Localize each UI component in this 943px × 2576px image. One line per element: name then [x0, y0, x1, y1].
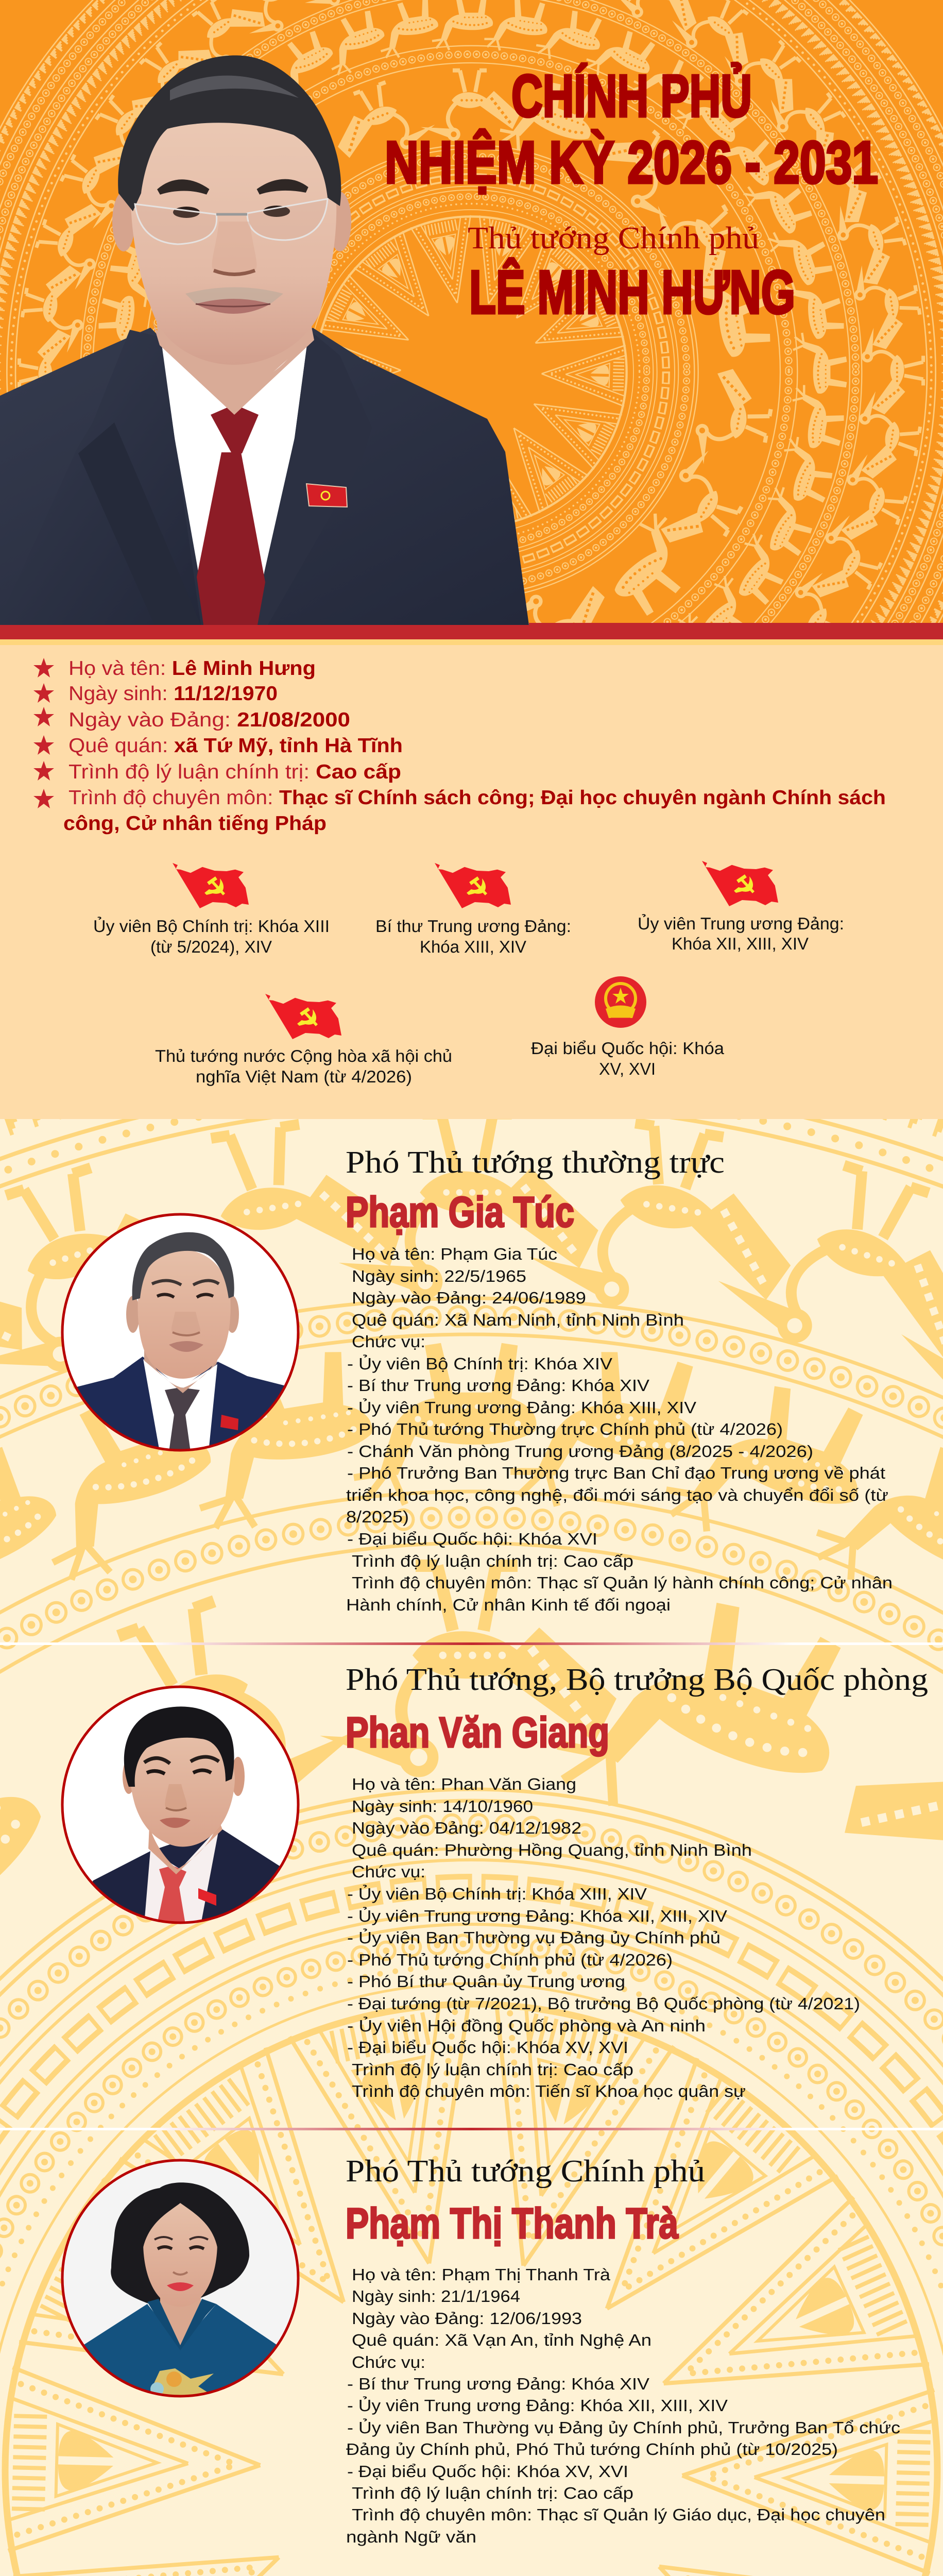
biography text: Ngày vào Đảng: 04/12/1982 — [352, 1819, 581, 1837]
caption: Central Committee — [638, 914, 844, 953]
caption: Politburo: (từ 5/2024), XIV — [150, 937, 272, 956]
biography text: Chức vụ: — [352, 1332, 425, 1351]
biography text: Trình độ lý luận chính trị: Cao cấp — [352, 2484, 633, 2502]
portrait: Phan Văn Giang — [61, 1686, 304, 1928]
hero name: LÊ MINH HƯNG — [469, 258, 795, 327]
icon: national emblem — [595, 976, 646, 1028]
biography text: - Phó Trưởng Ban Thường trực Ban Chỉ đạo Trung ương về phát — [347, 1464, 885, 1482]
portrait: Phạm Thị Thanh Trà — [57, 2159, 304, 2402]
name: Phạm Thị Thanh Trà — [346, 2199, 679, 2247]
biography text: Quê quán: Phường Hồng Quang, tỉnh Ninh Bình — [352, 1841, 752, 1859]
panel: Phan Văn Giang — [61, 1663, 928, 2100]
biography text: Trình độ chuyên môn: Thạc sĩ Quản lý hành chính công; Cử nhân — [352, 1573, 893, 1592]
heading: Phó Thủ tướng Chính phủ — [346, 2154, 705, 2189]
biography text: 8/2025) — [346, 1507, 409, 1526]
biography text: - Ủy viên Bộ Chính trị: Khóa XIII, XIV — [347, 1885, 647, 1903]
personal details list: Họ và tên: Lê Minh Hưng — [68, 657, 316, 680]
hero background: bronze drum — [0, 0, 943, 623]
red band — [0, 623, 943, 639]
hero portrait: Lê Minh Hưng — [0, 56, 529, 625]
biography text: - Bí thư Trung ương Đảng: Khóa XIV — [347, 1376, 650, 1395]
caption: Secretariat: Bí thư Trung ương Đảng: — [375, 917, 571, 936]
biography text: Trình độ lý luận chính trị: Cao cấp — [352, 1552, 633, 1570]
biography text: Ngày vào Đảng: 12/06/1993 — [352, 2309, 582, 2328]
biography text: Họ và tên: Phạm Gia Túc — [352, 1245, 557, 1263]
biography text: - Đại tướng (từ 7/2021), Bộ trưởng Bộ Quốc phòng (từ 4/2021) — [347, 1994, 860, 2013]
biography text: - Ủy viên Ban Thường vụ Đảng ủy Chính phủ — [347, 1928, 721, 1947]
hero subtitle: Thủ tướng Chính phủ — [468, 221, 759, 256]
dress ornament — [150, 2368, 214, 2395]
bullet stars — [33, 658, 54, 808]
personal details list: công, Cử nhân tiếng Pháp — [63, 812, 327, 835]
caption: Politburo: Ủy viên Bộ Chính trị: Khóa XIII — [93, 917, 330, 936]
biography text: - Bí thư Trung ương Đảng: Khóa XIV — [347, 2375, 650, 2393]
biography text: - Phó Thủ tướng Chính phủ (từ 4/2026) — [347, 1951, 673, 1969]
biography text: Đảng ủy Chính phủ, Phó Thủ tướng Chính phủ (từ 10/2025) — [346, 2440, 838, 2459]
biography text: - Ủy viên Ban Thường vụ Đảng ủy Chính phủ, Trưởng Ban Tổ chức — [347, 2418, 900, 2437]
icon: party flag 1 — [173, 863, 249, 908]
biography text: - Ủy viên Trung ương Đảng: Khóa XII, XIII, XIV — [347, 1907, 728, 1925]
biography text: - Ủy viên Hội đồng Quốc phòng và An ninh — [347, 2016, 706, 2035]
personal details list — [63, 657, 886, 835]
biography text: triển khoa học, công nghệ, đổi mới sáng tạo và chuyển đổi số (từ — [346, 1486, 888, 1504]
panel: Phạm Gia Túc — [57, 1145, 893, 1614]
biography text: Chức vụ: — [352, 1862, 425, 1881]
biography text: Quê quán: Xã Nam Ninh, tỉnh Ninh Bình — [352, 1311, 684, 1329]
caption: National Assembly: Đại biểu Quốc hội: Khóa — [531, 1039, 725, 1058]
icon: party flag 3 — [702, 861, 778, 906]
biography text: - Chánh Văn phòng Trung ương Đảng (8/2025 - 4/2026) — [347, 1442, 813, 1461]
biography text: - Ủy viên Bộ Chính trị: Khóa XIV — [347, 1354, 613, 1373]
heading: Phó Thủ tướng thường trực — [346, 1145, 725, 1180]
caption: National Assembly: XV, XVI — [599, 1059, 656, 1078]
biography text: Trình độ lý luận chính trị: Cao cấp — [352, 2060, 633, 2079]
caption: Secretariat — [375, 917, 571, 956]
biography text: Trình độ chuyên môn: Thạc sĩ Quản lý Giáo dục, Đại học chuyên — [352, 2505, 885, 2524]
hero panel — [0, 0, 943, 625]
lower background: bronze drum — [0, 1011, 943, 2576]
name: Phạm Gia Túc — [346, 1188, 574, 1236]
biography text: Trình độ chuyên môn: Tiến sĩ Khoa học quân sự — [352, 2082, 746, 2100]
biography text: Hành chính, Cử nhân Kinh tế đối ngoại — [346, 1596, 671, 1614]
lapel pin — [220, 1415, 238, 1430]
caption: Politburo — [93, 917, 330, 956]
biography text: - Đại biểu Quốc hội: Khóa XV, XVI — [347, 2038, 628, 2057]
yellow strip — [0, 639, 943, 645]
biography text: Ngày sinh: 21/1/1964 — [352, 2287, 520, 2306]
divider 2 — [0, 2128, 943, 2130]
biography text — [346, 1245, 893, 1614]
biography text: Họ và tên: Phan Văn Giang — [352, 1775, 576, 1793]
personal details list: Ngày sinh: 11/12/1970 — [68, 683, 278, 705]
caption: National Assembly — [531, 1039, 725, 1078]
caption: Central Committee: Khóa XII, XIII, XIV — [672, 934, 809, 953]
panel: Phạm Thị Thanh Trà — [57, 2154, 900, 2546]
panel: prime minister info — [0, 645, 943, 1119]
personal details list: Trình độ chuyên môn: Thạc sĩ Chính sách công; Đại học chuyên ngành Chính sách — [68, 787, 886, 809]
personal details list: Trình độ lý luận chính trị: Cao cấp — [68, 761, 401, 783]
name: Phan Văn Giang — [346, 1708, 609, 1756]
biography text: ngành Ngữ văn — [346, 2528, 476, 2546]
biography text: Ngày sinh: 22/5/1965 — [352, 1267, 526, 1285]
lapel pin — [198, 1888, 216, 1906]
biography text: - Ủy viên Trung ương Đảng: Khóa XII, XIII, XIV — [347, 2396, 728, 2415]
biography text: - Phó Thủ tướng Thường trực Chính phủ (từ 4/2026) — [347, 1420, 783, 1438]
caption: Prime Minister — [155, 1046, 452, 1086]
biography text: - Đại biểu Quốc hội: Khóa XV, XVI — [347, 2462, 628, 2481]
biography text: Ngày vào Đảng: 24/06/1989 — [352, 1289, 586, 1307]
biography text: - Phó Bí thư Quân ủy Trung ương — [347, 1972, 625, 1991]
icon: party flag 4 — [265, 994, 341, 1039]
biography text: Ngày sinh: 14/10/1960 — [352, 1797, 533, 1816]
biography text: Họ và tên: Phạm Thị Thanh Trà — [352, 2265, 610, 2284]
portrait: Phạm Gia Túc — [57, 1213, 304, 1456]
icon: party flag 2 — [435, 863, 511, 908]
heading: Phó Thủ tướng, Bộ trưởng Bộ Quốc phòng — [346, 1663, 928, 1697]
biography text: Quê quán: Xã Vạn An, tỉnh Nghệ An — [352, 2331, 651, 2349]
caption: Prime Minister: Thủ tướng nước Cộng hòa xã hội chủ — [155, 1046, 452, 1065]
caption: Prime Minister: nghĩa Việt Nam (từ 4/2026) — [196, 1067, 412, 1086]
caption: Secretariat: Khóa XIII, XIV — [420, 937, 526, 956]
biography text — [346, 2265, 900, 2546]
biography text: Chức vụ: — [352, 2353, 425, 2371]
biography text: - Đại biểu Quốc hội: Khóa XVI — [347, 1530, 597, 1548]
caption: Central Committee: Ủy viên Trung ương Đảng: — [638, 914, 844, 933]
lapel pin — [306, 484, 347, 507]
personal details list: Quê quán: xã Tứ Mỹ, tỉnh Hà Tĩnh — [68, 735, 403, 757]
hero title line 1: CHÍNH PHỦ — [511, 62, 752, 129]
biography text: - Ủy viên Trung ương Đảng: Khóa XIII, XIV — [347, 1398, 697, 1417]
personal details list: Ngày vào Đảng: 21/08/2000 — [68, 709, 350, 731]
biography text — [347, 1775, 860, 2100]
divider 1 — [0, 1642, 943, 1645]
